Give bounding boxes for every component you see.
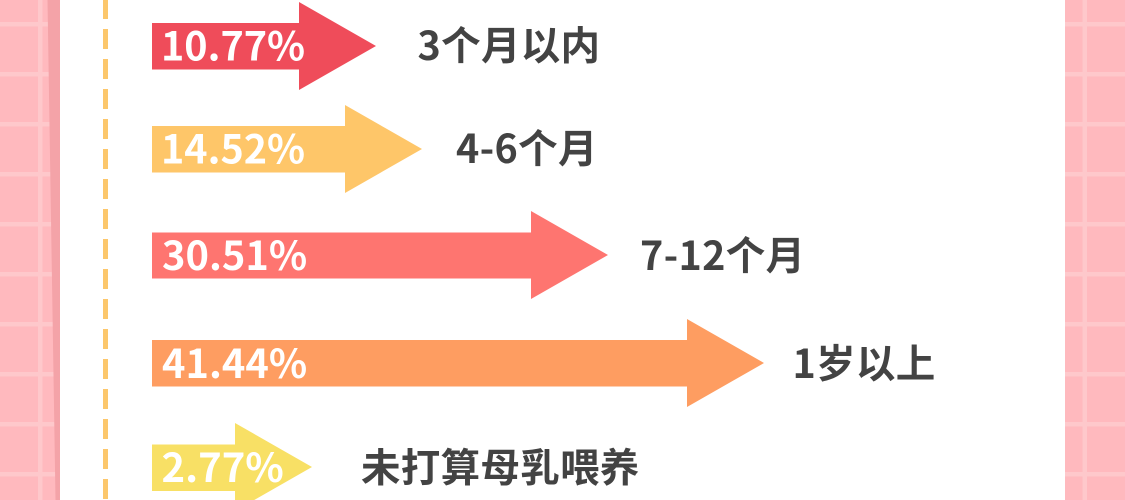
label: 3个月以内: 3个月以内 <box>418 15 600 72</box>
arrow: 14.52% <box>152 105 422 193</box>
arrow: 41.44% <box>152 319 764 407</box>
label: 7-12个月: 7-12个月 <box>640 225 805 282</box>
dashed vertical timeline <box>103 0 108 500</box>
label: 1岁以上: 1岁以上 <box>792 333 936 390</box>
arrow: 14.52%: 14.52% <box>161 118 305 176</box>
arrow: 2.77% <box>152 423 312 500</box>
label: 未打算母乳喂养: 未打算母乳喂养 <box>361 437 640 494</box>
arrow: 41.44%: 41.44% <box>162 333 307 390</box>
label: 4-6个月: 4-6个月 <box>456 118 598 175</box>
right checkered background panel <box>1065 0 1125 500</box>
arrow: 10.77% <box>152 2 376 90</box>
arrow: 30.51% <box>152 211 608 299</box>
left checkered background panel <box>0 0 60 500</box>
arrow: 10.77%: 10.77% <box>161 16 305 72</box>
arrow: 30.51%: 30.51% <box>162 225 307 282</box>
arrow: 2.77%: 2.77% <box>162 436 284 494</box>
